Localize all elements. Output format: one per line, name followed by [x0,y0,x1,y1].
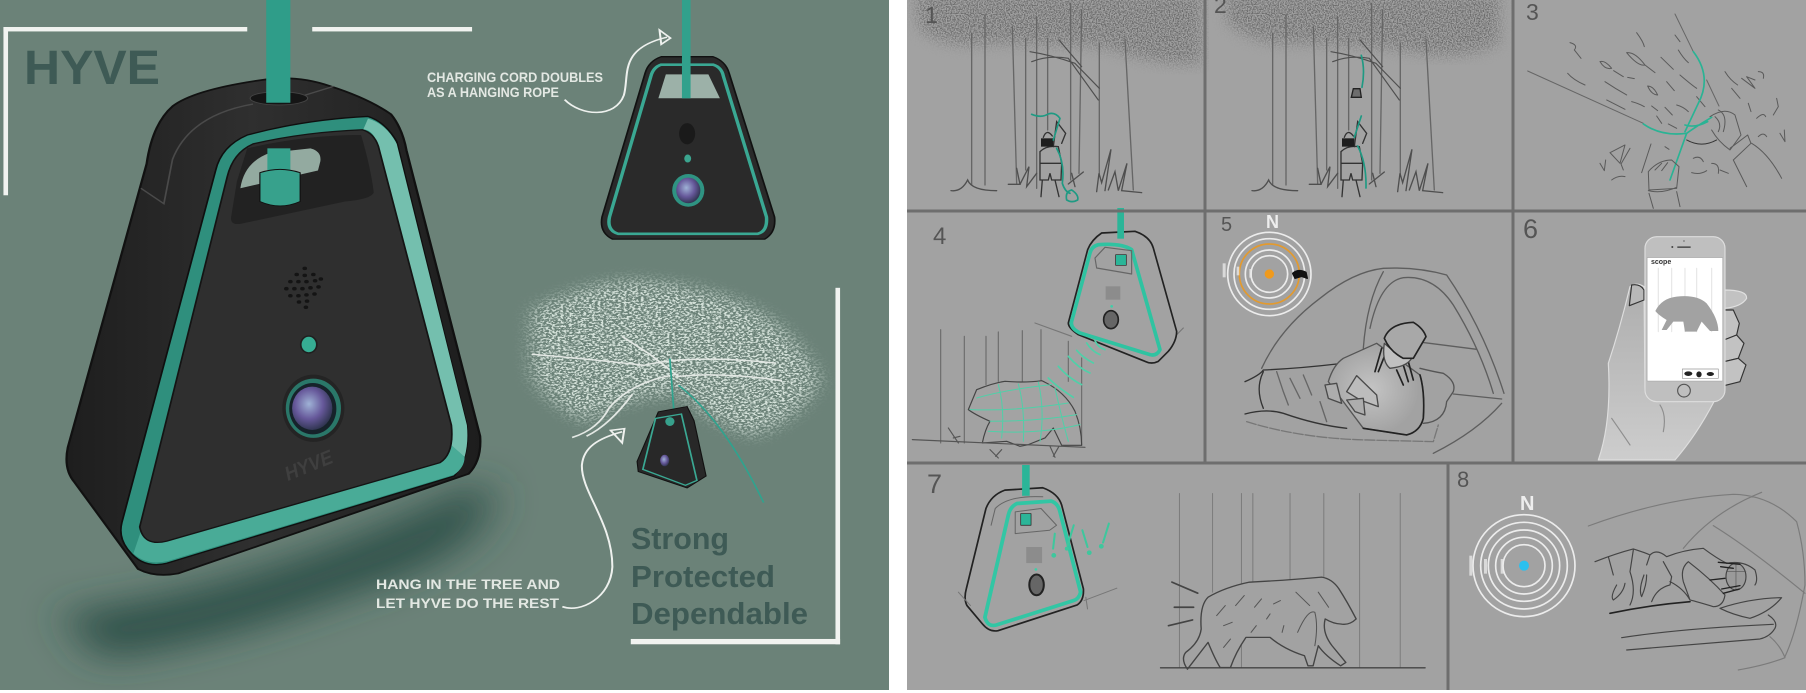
scene 4: device detects bear [912,208,1183,458]
scene 7: device alerts [958,465,1425,669]
tablet [1347,376,1378,407]
bark marks [1568,33,1785,142]
bear [968,381,1082,446]
scene numbers: 4 [933,223,946,250]
label: hang in tree: HANG IN THE TREE AND [376,576,560,592]
sleeping bag [1245,364,1347,428]
label: charging cord [427,69,603,100]
ring [121,116,468,565]
label: hang in tree [376,576,560,611]
arc [1687,140,1717,144]
woods and person [1252,3,1443,197]
cord [1354,55,1366,188]
tagline: Dependable [631,596,808,631]
pillow [1420,368,1454,423]
pillow and mattress [1622,598,1782,650]
scene 8: camper asleep [1469,492,1805,670]
arrow: hang in tree [562,429,624,608]
scene 3: tying knot [1528,14,1785,208]
top socket [250,92,308,105]
storyboard gridlines [907,0,1806,690]
label: hang in tree: LET HYVE DO THE REST [376,595,559,611]
ring light side [363,119,467,457]
motion marks [1168,582,1198,626]
rope [1643,52,1712,180]
tagline: Protected [631,559,775,594]
outline heavy [1363,375,1424,435]
hair [1375,348,1413,385]
hoisted device [1351,89,1361,97]
camera [282,375,344,442]
large device [67,0,480,575]
scene numbers: 5 [1221,214,1232,236]
scene 6: phone in hand [1598,237,1747,460]
small rope [682,0,691,98]
title: HYVE: HYVE [24,42,160,95]
scene 1: person raising cord [915,0,1202,202]
rope clamp [260,169,300,206]
frame: top left [3,27,472,195]
sleeping camper [1595,548,1757,607]
tagline: Strong [631,521,729,556]
face [140,130,452,542]
fur marks [1217,592,1329,647]
device logo: HYVE [282,446,337,486]
seam [141,86,334,204]
bear [1183,577,1356,669]
branch line [1035,323,1183,336]
distance ticks [1223,263,1252,278]
small speaker [679,123,695,144]
compass N labels [1266,212,1534,515]
compass [1228,232,1311,316]
foliage [1226,0,1499,55]
tree canopy [532,281,819,503]
grip recess [231,135,374,224]
thumb [1629,285,1644,306]
hanging device [637,406,706,488]
fingers [1724,290,1747,386]
floor [1247,422,1438,442]
tree edges [1528,14,1719,123]
panel: storyboard [907,0,1806,690]
small ring [609,65,767,234]
sketch device [1068,208,1177,363]
small window [658,74,720,98]
scene numbers: 8 [1457,467,1469,492]
cord [1032,113,1070,193]
woods and person [951,3,1142,197]
left marks [1600,144,1728,180]
tagline [631,521,808,631]
small body [602,57,775,239]
speaker [284,267,323,309]
alert marks [1053,524,1109,549]
sketch device [958,465,1117,631]
scene 2: device hoisted [1226,0,1499,197]
hands [1325,383,1365,415]
scene 5: camper in tent [1223,232,1504,453]
torso [1328,343,1424,435]
scribble foliage [532,281,819,436]
compass N labels: N [1520,493,1534,515]
small device: rope detail [602,0,775,239]
tent [1262,268,1504,453]
target dot [1265,269,1274,279]
ground [912,428,1085,458]
bed edge [1610,602,1690,613]
palm lines [1612,405,1664,445]
compass N labels: N [1266,212,1279,232]
scene numbers: 6 [1523,214,1538,244]
right hand [1710,110,1782,187]
scan waves [1048,341,1105,397]
frame: bottom right [631,288,840,644]
arrow: charging cord [565,30,670,112]
panel: product render [0,0,889,690]
compass [1473,515,1575,617]
rope top [266,0,290,103]
face [1384,343,1412,368]
small light [684,155,691,163]
window [240,148,320,188]
small camera [672,174,704,207]
hand [1598,284,1714,460]
phone [1645,237,1725,402]
background trunks [941,330,1082,445]
status light [301,336,317,353]
device on ground [1066,190,1078,202]
scene numbers [925,0,1539,499]
bear scan mesh [970,382,1080,441]
label: charging cord: CHARGING CORD DOUBLES [427,69,603,85]
distance ticks [1469,556,1504,576]
target dot [1519,561,1529,571]
left hand [1648,160,1680,208]
device shadow [63,478,489,660]
scene numbers: 7 [927,469,942,499]
trunks [1179,493,1400,667]
bag folds [1277,372,1327,422]
tent [1588,492,1805,670]
alert dots [1051,544,1104,558]
bear photo [1655,296,1718,332]
bear marker [1293,271,1307,278]
hanging cord [670,359,764,503]
screen lines [1658,268,1712,332]
phone app name: scope [1651,259,1671,266]
label: charging cord: AS A HANGING ROPE [427,84,559,100]
app icons [1682,369,1718,378]
foliage [915,0,1202,64]
ring bottom [133,443,465,562]
head [1710,562,1746,593]
hat [1384,322,1426,358]
rope in window [267,148,290,175]
ground [1161,666,1425,670]
body [67,78,480,575]
scene numbers: 1 [925,2,938,28]
branches [532,337,782,437]
